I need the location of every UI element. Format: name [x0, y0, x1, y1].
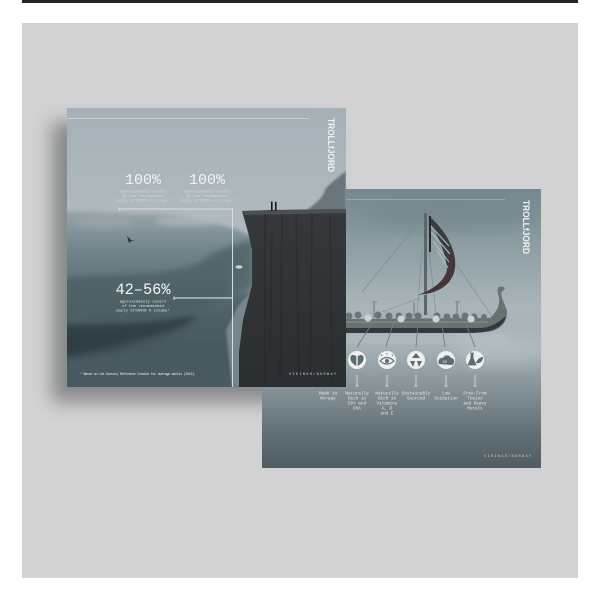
benefit labels: Naturally [375, 392, 399, 396]
ship illustration [346, 213, 507, 347]
benefit labels: and E [381, 412, 394, 416]
far headland [67, 239, 252, 305]
brand: TROLLfJORD [521, 200, 531, 254]
hikers on the cliff [271, 201, 277, 210]
benefit labels: Sustainably [402, 392, 431, 396]
stat: vitamin D: approximately covers [120, 190, 167, 194]
brand: TROLLfJORD [326, 118, 336, 172]
icon: recycling leaves [407, 351, 425, 369]
benefit labels: Sourced [407, 396, 425, 402]
stat: vitamin A: of the recommended [122, 304, 164, 309]
water [67, 342, 230, 383]
mast [424, 213, 427, 315]
icon: eye [378, 351, 396, 369]
rigging [362, 217, 491, 316]
stat connector [174, 296, 232, 300]
icon: heart [348, 351, 366, 369]
panel: left card with fjord cliff [60, 108, 346, 395]
benefit labels: Rich in [378, 396, 396, 402]
benefit labels: Made in [319, 392, 337, 396]
bird [127, 236, 135, 243]
stat: vitamin E: 100% [189, 172, 226, 189]
bracket connector [119, 208, 232, 387]
stat: vitamin E: daily VITAMIN E intake* [180, 198, 234, 204]
stat: vitamin A [115, 281, 171, 314]
stat: vitamin E: of the recommended [186, 194, 228, 199]
dark shore reflection [60, 315, 197, 356]
footer mark: VIKINGR/NORWAY [484, 454, 532, 459]
stat: vitamin E [180, 172, 234, 204]
distant cloud puff [236, 265, 242, 269]
benefit labels: A, D [382, 406, 393, 412]
card shadow [52, 122, 332, 402]
haze beside the cliff [240, 272, 252, 293]
fjord mountains [67, 210, 251, 387]
panel: right card with longship [262, 189, 550, 468]
clouds over the fjord [84, 220, 126, 226]
footer mark: VIKINGR/NORWAY [289, 372, 337, 377]
benefit labels: Toxins [467, 396, 483, 402]
icon row [348, 351, 484, 369]
benefit labels: Metals [467, 406, 483, 412]
icon: flask and leaf [466, 351, 484, 369]
distant ridge behind cliff [306, 170, 346, 210]
benefit labels: Norway [320, 396, 336, 402]
icon: oxidation cloud: O2 [442, 361, 448, 365]
reflection [346, 334, 506, 344]
top black bar [22, 0, 578, 3]
benefit labels: Naturally [345, 392, 369, 396]
benefit labels: Vitamins [377, 402, 398, 406]
small posts [374, 302, 457, 318]
oars [357, 322, 475, 347]
shields [346, 312, 487, 319]
benefit labels [319, 392, 487, 416]
stat: vitamin A: approximately covers [120, 300, 167, 304]
benefit labels: Oxidation [434, 396, 458, 402]
stat: vitamin D: daily VITAMIN D intake* [116, 198, 170, 204]
benefit labels: DHA [353, 406, 361, 412]
top rule [67, 118, 309, 119]
benefit labels: Free From [463, 392, 487, 396]
benefit labels: EPA and [348, 402, 366, 406]
benefit labels: Low [442, 392, 450, 396]
stat: vitamin A: 42–56% [115, 281, 171, 299]
stat: vitamin A: daily VITAMIN A intake* [116, 308, 170, 314]
cliff rock [239, 209, 346, 387]
benefit labels: Rich in [348, 396, 366, 402]
sail [418, 216, 455, 295]
stat: vitamin D [116, 172, 170, 204]
horizon line [346, 199, 505, 200]
connector ticks [356, 375, 476, 386]
stat: vitamin D: of the recommended [122, 194, 164, 199]
hull [346, 286, 507, 333]
benefit labels: and Heavy [463, 402, 487, 406]
stat: vitamin E: approximately covers [184, 190, 231, 194]
clouds [400, 213, 494, 224]
footnote: * Based on the Dietary Reference Intakes for average adults (2019). [80, 372, 196, 377]
rock fissures [264, 214, 332, 284]
stat: vitamin D: 100% [125, 172, 162, 189]
